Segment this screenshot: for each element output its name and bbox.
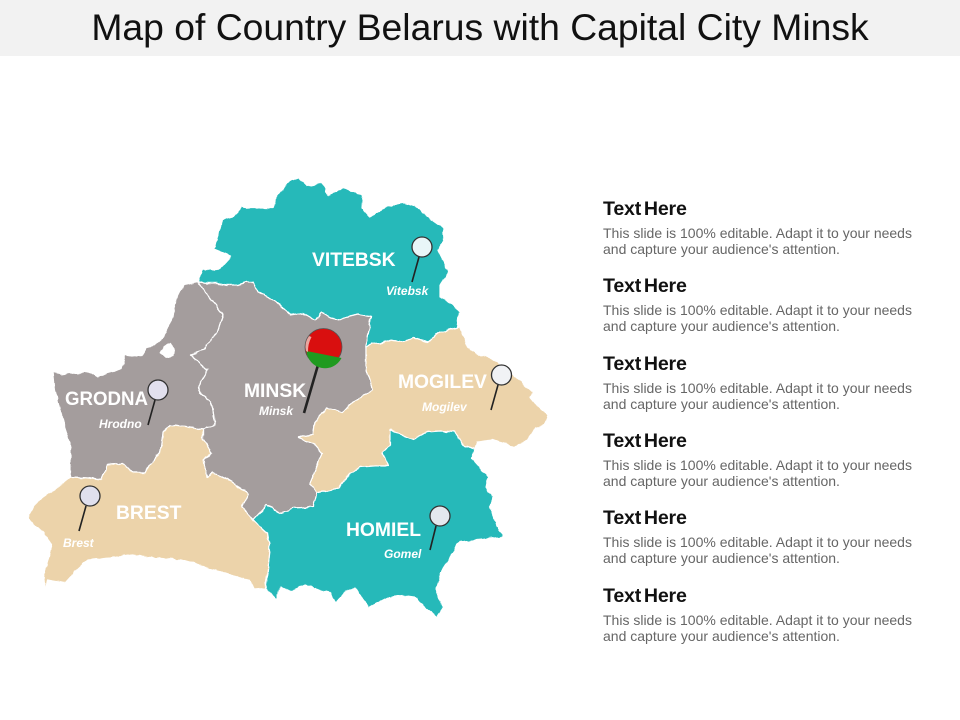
text block 2: Text Here xyxy=(603,275,687,297)
text block 1: and capture your audience's attention. xyxy=(603,241,840,257)
text block 2: and capture your audience's attention. xyxy=(603,318,840,334)
title banner xyxy=(0,0,960,56)
text block 1: Text Here xyxy=(603,198,687,220)
text block 1: This slide is 100% editable. Adapt it to your needs xyxy=(603,225,912,241)
text block 4: This slide is 100% editable. Adapt it to your needs xyxy=(603,457,912,473)
all regions xyxy=(27,177,548,617)
label: Grodna: GRODNA xyxy=(65,389,148,410)
text block 2 xyxy=(603,275,912,334)
label: Homiel: HOMIEL xyxy=(346,520,421,541)
label: Minsk xyxy=(244,381,306,418)
label: Grodna: Hrodno xyxy=(99,417,142,431)
label: Minsk: Minsk xyxy=(259,404,294,418)
region: Mogilev xyxy=(298,327,548,493)
text block 4: Text Here xyxy=(603,430,687,452)
label: Brest: Brest xyxy=(63,536,95,550)
text block 5: and capture your audience's attention. xyxy=(603,550,840,566)
text block 6: This slide is 100% editable. Adapt it to your needs xyxy=(603,612,912,628)
region: Minsk xyxy=(191,282,372,520)
label: Grodna xyxy=(65,389,148,431)
text block 5 xyxy=(603,507,912,566)
pin: Vitebsk xyxy=(412,237,432,282)
text block 4 xyxy=(603,430,912,489)
pin: Grodna xyxy=(148,380,168,425)
region: Brest xyxy=(27,425,270,590)
label: Homiel: Gomel xyxy=(384,547,422,561)
text block 3: and capture your audience's attention. xyxy=(603,396,840,412)
pin: Mogilev xyxy=(491,365,512,410)
text block 1 xyxy=(603,198,912,257)
text block 4: and capture your audience's attention. xyxy=(603,473,840,489)
label: Mogilev: MOGILEV xyxy=(398,372,487,393)
label: Brest: BREST xyxy=(116,503,182,524)
region: Homiel xyxy=(253,430,503,617)
region: Vitebsk xyxy=(198,177,459,348)
text block 5: Text Here xyxy=(603,507,687,529)
label: Vitebsk: VITEBSK xyxy=(312,250,396,271)
text block 2: This slide is 100% editable. Adapt it to your needs xyxy=(603,302,912,318)
pin: Minsk capital with Belarus flag xyxy=(304,328,342,413)
text block 3: Text Here xyxy=(603,353,687,375)
text block 6: Text Here xyxy=(603,585,687,607)
title: Map of Country Belarus with Capital City Minsk xyxy=(91,6,869,48)
pin: Homiel xyxy=(430,506,450,550)
text block 3 xyxy=(603,353,912,412)
label: Vitebsk xyxy=(312,250,430,298)
text block 3: This slide is 100% editable. Adapt it to your needs xyxy=(603,380,912,396)
text block 5: This slide is 100% editable. Adapt it to your needs xyxy=(603,534,912,550)
label: Mogilev xyxy=(398,372,487,414)
label: Minsk: MINSK xyxy=(244,381,306,402)
text block 6: and capture your audience's attention. xyxy=(603,628,840,644)
region: Grodna xyxy=(53,282,223,480)
label: Mogilev: Mogilev xyxy=(422,400,468,414)
lake in Grodna xyxy=(160,342,175,358)
text block 6 xyxy=(603,585,912,644)
label: Vitebsk: Vitebsk xyxy=(386,284,430,298)
label: Homiel xyxy=(346,520,422,561)
pin: Brest xyxy=(79,486,100,531)
label: Brest xyxy=(63,503,182,550)
